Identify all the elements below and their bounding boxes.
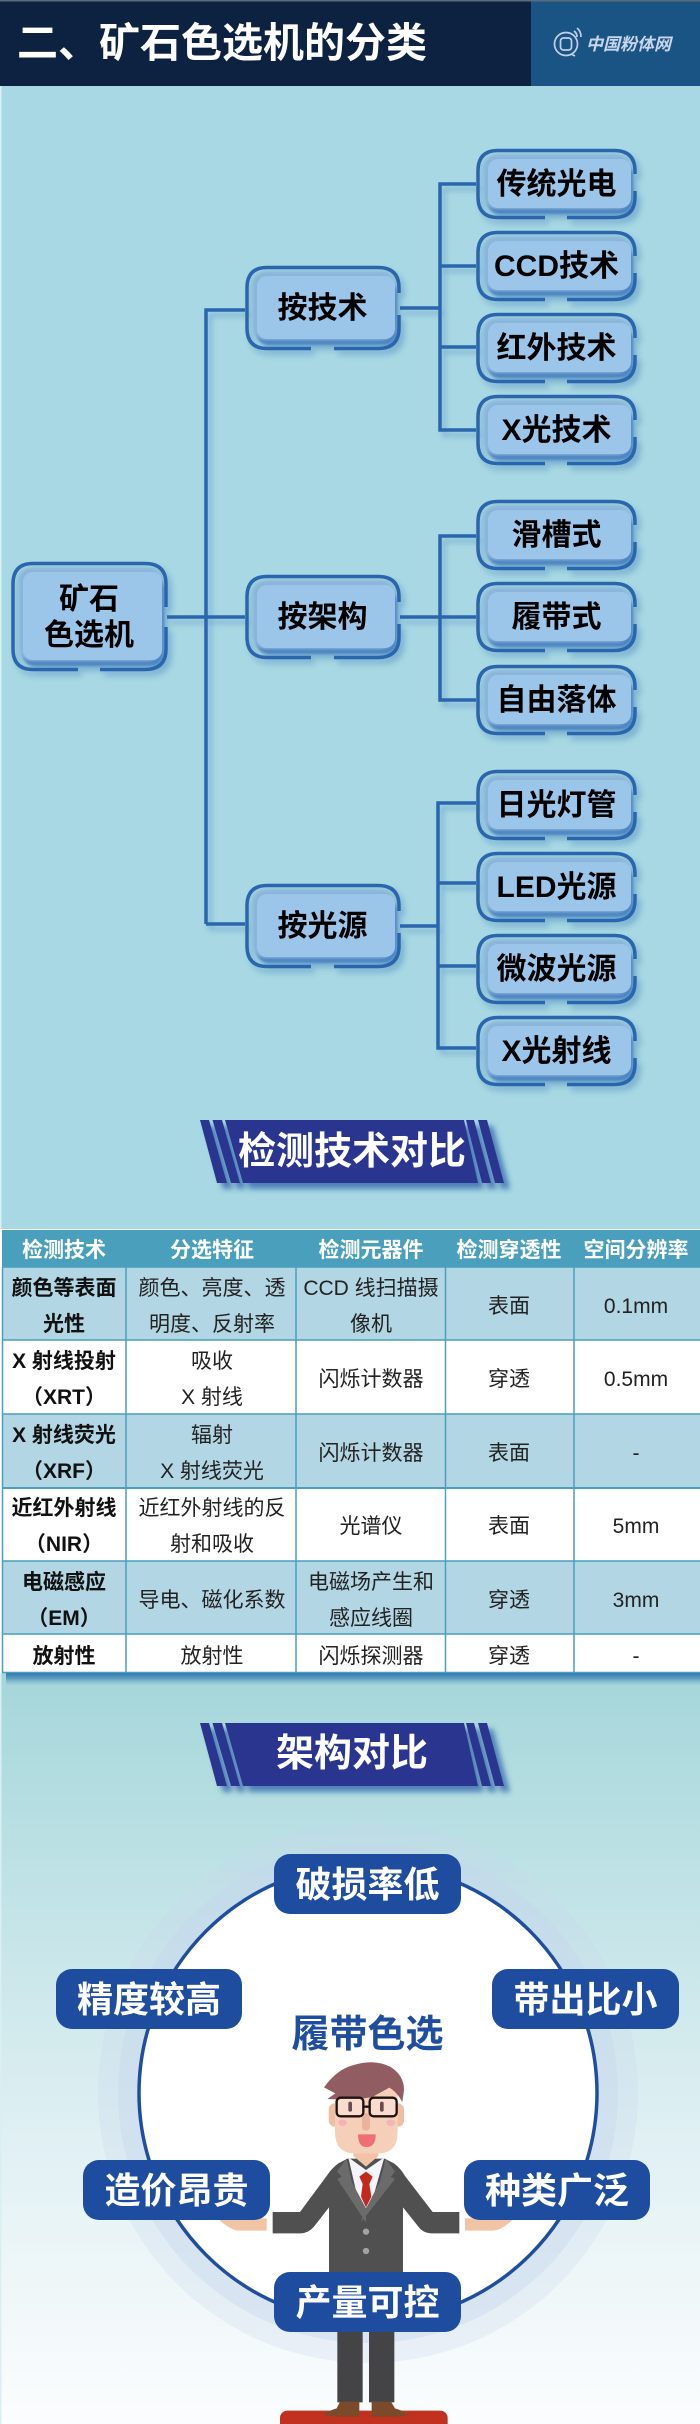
pill: 产量可控: 产量可控 [295, 2282, 440, 2323]
title: 二、矿石色选机的分类 [17, 20, 427, 66]
halo rings [98, 1823, 638, 2363]
pill: 破损率低 [274, 1854, 461, 1914]
leaf node: 滑槽式 [478, 502, 635, 568]
section banner: 架构对比 [200, 1723, 504, 1786]
pill: 精度较高: 精度较高 [77, 1979, 221, 2020]
pill: 造价昂贵 [83, 2160, 270, 2220]
table row: X射线荧光: 辐射 [191, 1424, 233, 1447]
table row: 颜色等表面光性: 0.1mm [604, 1295, 668, 1318]
table header row: 检测技术 [22, 1238, 106, 1262]
table row: 颜色等表面光性: 明度、反射率 [149, 1313, 275, 1336]
table row: 近红外射线: 表面 [488, 1515, 530, 1538]
root node: 矿石色选机: 矿石 [59, 583, 119, 616]
ears [329, 2103, 404, 2127]
leaf node: 自由落体 [478, 666, 635, 734]
leaf node: 自由落体: 自由落体 [496, 684, 616, 717]
tree connector lines [167, 184, 476, 1048]
table header row: 检测穿透性 [456, 1238, 562, 1262]
group node: 按光源 [247, 886, 399, 966]
section banner: 架构对比: 架构对比 [276, 1733, 428, 1775]
pill: 带出比小 [492, 1969, 679, 2029]
heading: 履带色选: 履带色选 [291, 2014, 444, 2056]
group node: 按架构: 按架构 [278, 601, 368, 634]
root node: 矿石色选机 [13, 564, 166, 670]
buttons [363, 2228, 369, 2235]
table row: 放射性: 闪烁探测器 [318, 1645, 424, 1668]
table row: X射线荧光: X 射线荧光 [160, 1460, 264, 1483]
pill: 种类广泛: 种类广泛 [485, 2170, 629, 2211]
group node: 按技术: 按技术 [278, 292, 368, 325]
group node: 按技术 [247, 268, 399, 348]
logo: 中国粉体网: 中国粉体网 [586, 35, 674, 54]
table row: 颜色等表面光性: 光性 [43, 1313, 85, 1336]
table drop shadow [6, 1673, 700, 1686]
table row: 颜色等表面光性: CCD 线扫描摄 [303, 1277, 439, 1300]
table row: X射线荧光 [12, 1424, 640, 1483]
pill: 种类广泛 [464, 2160, 650, 2220]
table row: 颜色等表面光性: 像机 [350, 1313, 392, 1336]
platform [280, 2411, 448, 2424]
neck [353, 2148, 378, 2167]
table row: 放射性: - [632, 1645, 640, 1668]
table row: 放射性 [32, 1645, 640, 1668]
tree diagram: ore colour sorter classification [13, 150, 635, 1084]
leaf node: 履带式 [478, 584, 635, 650]
table row: X射线荧光: 表面 [488, 1442, 530, 1465]
leaf node: X光射线 [478, 1018, 635, 1084]
table row: 电磁感应: 电磁场产生和 [308, 1571, 434, 1594]
illustration: businessman [218, 2062, 514, 2424]
table row: 近红外射线: 近红外射线 [12, 1497, 116, 1520]
table row: 颜色等表面光性: 颜色等表面 [12, 1277, 116, 1300]
lapels [337, 2159, 395, 2223]
table row: X射线荧光: X 射线荧光 [12, 1424, 116, 1447]
white circle [139, 1864, 597, 2322]
table row: 近红外射线: 光谱仪 [340, 1515, 402, 1538]
pill: 产量可控 [274, 2272, 461, 2332]
table row: 电磁感应: 电磁感应 [22, 1570, 106, 1594]
table row: 电磁感应: （EM） [27, 1607, 101, 1630]
leaf node: 传统光电 [478, 150, 635, 218]
table row: 放射性: 放射性 [32, 1645, 96, 1668]
table row: 近红外射线: 射和吸收 [170, 1533, 254, 1556]
pill: 破损率低: 破损率低 [295, 1864, 440, 1905]
table header row [22, 1238, 688, 1262]
leaf node: 微波光源: 微波光源 [496, 953, 616, 986]
leaf node: CCD技术 [478, 232, 635, 300]
table row: 电磁感应 [22, 1570, 659, 1630]
table header row: 分选特征 [170, 1239, 254, 1262]
table row: X射线荧光: - [632, 1442, 640, 1465]
comparison table [0, 1229, 700, 1686]
table row: X射线投射: （XRT） [22, 1386, 106, 1409]
table row: X射线投射: 0.5mm [604, 1368, 668, 1391]
table row: X射线荧光: 闪烁计数器 [318, 1442, 424, 1465]
leaf node: 日光灯管 [478, 772, 635, 838]
leaf node: 微波光源 [478, 936, 635, 1002]
table row: 颜色等表面光性: 颜色、亮度、透 [138, 1277, 286, 1300]
shoes [323, 2402, 409, 2417]
table header row: 空间分辨率 [584, 1238, 688, 1262]
table row: X射线投射: 穿透 [488, 1368, 530, 1391]
shirt [348, 2157, 384, 2208]
pill: 带出比小: 带出比小 [513, 1979, 658, 2020]
table row: X射线投射: 闪烁计数器 [318, 1368, 424, 1391]
table row: 近红外射线: （NIR） [25, 1533, 103, 1556]
face [335, 2080, 398, 2153]
leaf node: LED光源 [478, 854, 635, 920]
leaf node: X光射线: X光射线 [501, 1035, 612, 1068]
leaf node: X光技术 [478, 396, 635, 464]
pill: 造价昂贵: 造价昂贵 [104, 2170, 249, 2211]
icon: at sign with signal waves [554, 28, 581, 56]
table row: 近红外射线: 5mm [613, 1515, 659, 1538]
table row: 电磁感应: 穿透 [488, 1589, 530, 1612]
section banner: 检测技术对比 [200, 1120, 504, 1183]
tie [359, 2172, 373, 2207]
table row: 放射性: 穿透 [488, 1645, 530, 1668]
group node: 按架构 [247, 576, 399, 658]
hair [324, 2062, 404, 2102]
glasses [337, 2098, 397, 2116]
leaf node: 滑槽式: 滑槽式 [512, 519, 602, 552]
leaf node: 传统光电: 传统光电 [496, 168, 616, 201]
root node: 矿石色选机: 色选机 [44, 619, 134, 652]
table row: 颜色等表面光性: 表面 [488, 1295, 530, 1318]
pill: 精度较高 [56, 1969, 242, 2029]
leaf node: 红外技术: 红外技术 [496, 332, 616, 365]
table header row: 检测元器件 [318, 1238, 424, 1262]
section banner: 检测技术对比: 检测技术对比 [238, 1131, 466, 1173]
table row: 放射性: 放射性 [180, 1645, 244, 1668]
header bar [0, 0, 700, 86]
mouth [358, 2134, 376, 2147]
leaf node: 红外技术 [478, 314, 635, 382]
leaf node: 日光灯管: 日光灯管 [496, 789, 616, 822]
table row: 电磁感应: 3mm [613, 1589, 659, 1612]
table row: X射线投射: X 射线投射 [12, 1350, 116, 1373]
table row: X射线投射: X 射线 [181, 1386, 243, 1409]
cheeks [338, 2119, 347, 2126]
pupils [348, 2102, 352, 2112]
leaf node: 履带式: 履带式 [512, 601, 602, 634]
hands [218, 2218, 514, 2231]
table row: 电磁感应: 导电、磁化系数 [138, 1589, 286, 1612]
circle diagram: belt colour sorter [56, 1823, 679, 2424]
leaf node: X光技术: X光技术 [501, 414, 612, 447]
table row: X射线投射 [12, 1350, 668, 1409]
legs [337, 2328, 394, 2402]
table row: 颜色等表面光性 [12, 1277, 668, 1336]
table row: 电磁感应: 感应线圈 [329, 1607, 413, 1630]
suit [273, 2159, 459, 2277]
table row: 近红外射线 [12, 1497, 659, 1556]
logo: 中国粉体网 [554, 28, 674, 56]
table row: X射线荧光: （XRF） [22, 1460, 106, 1483]
table row: 近红外射线: 近红外射线的反 [138, 1497, 286, 1520]
leaf node: CCD技术: CCD技术 [494, 250, 619, 283]
group node: 按光源: 按光源 [278, 910, 368, 943]
leaf node: LED光源: LED光源 [496, 871, 616, 904]
table row: X射线投射: 吸收 [191, 1350, 233, 1373]
nose [362, 2113, 370, 2131]
